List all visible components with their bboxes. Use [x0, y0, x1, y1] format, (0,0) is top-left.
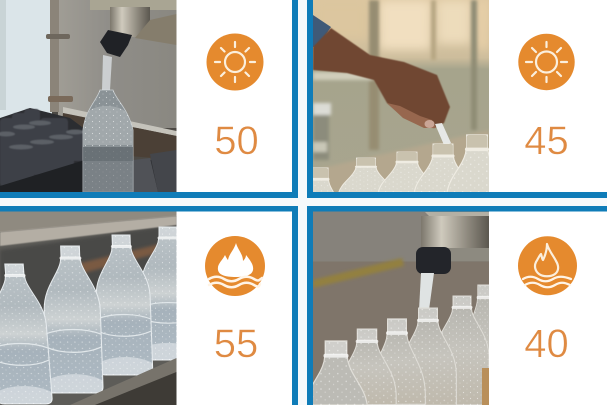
value: 45: 45 [524, 119, 569, 163]
blue frame: bottom left [0, 206, 298, 405]
white card [489, 212, 607, 405]
photo: bottle filling under a black nozzle [0, 0, 176, 192]
panel: bottom left, 55 [0, 212, 293, 405]
value: 40: 40 [524, 322, 569, 366]
white card [176, 0, 292, 192]
blue frame: top left [0, 0, 298, 198]
icon: flame over waves [205, 236, 265, 296]
panel: bottom right, 40 [305, 212, 607, 405]
bottles [0, 227, 195, 404]
icon: sun [206, 34, 264, 90]
icon: flame outline over waves [518, 236, 577, 295]
value: 50: 50 [214, 119, 259, 163]
photo: nozzle filling a row of bottles [313, 212, 489, 405]
photo: hand placing a tube into a bottle [313, 0, 489, 192]
bottles [313, 134, 489, 192]
photo: water-filled bottles on a conveyor [0, 212, 195, 405]
bottles [313, 284, 489, 405]
white card [489, 0, 607, 192]
blue frame: top right [307, 0, 607, 198]
value: 55: 55 [214, 322, 258, 366]
icon: sun [518, 34, 575, 90]
blue frame: bottom right [307, 206, 607, 405]
panel: top right, 45 [313, 0, 607, 192]
panel: top left, 50 [0, 0, 292, 192]
white card [176, 212, 292, 405]
